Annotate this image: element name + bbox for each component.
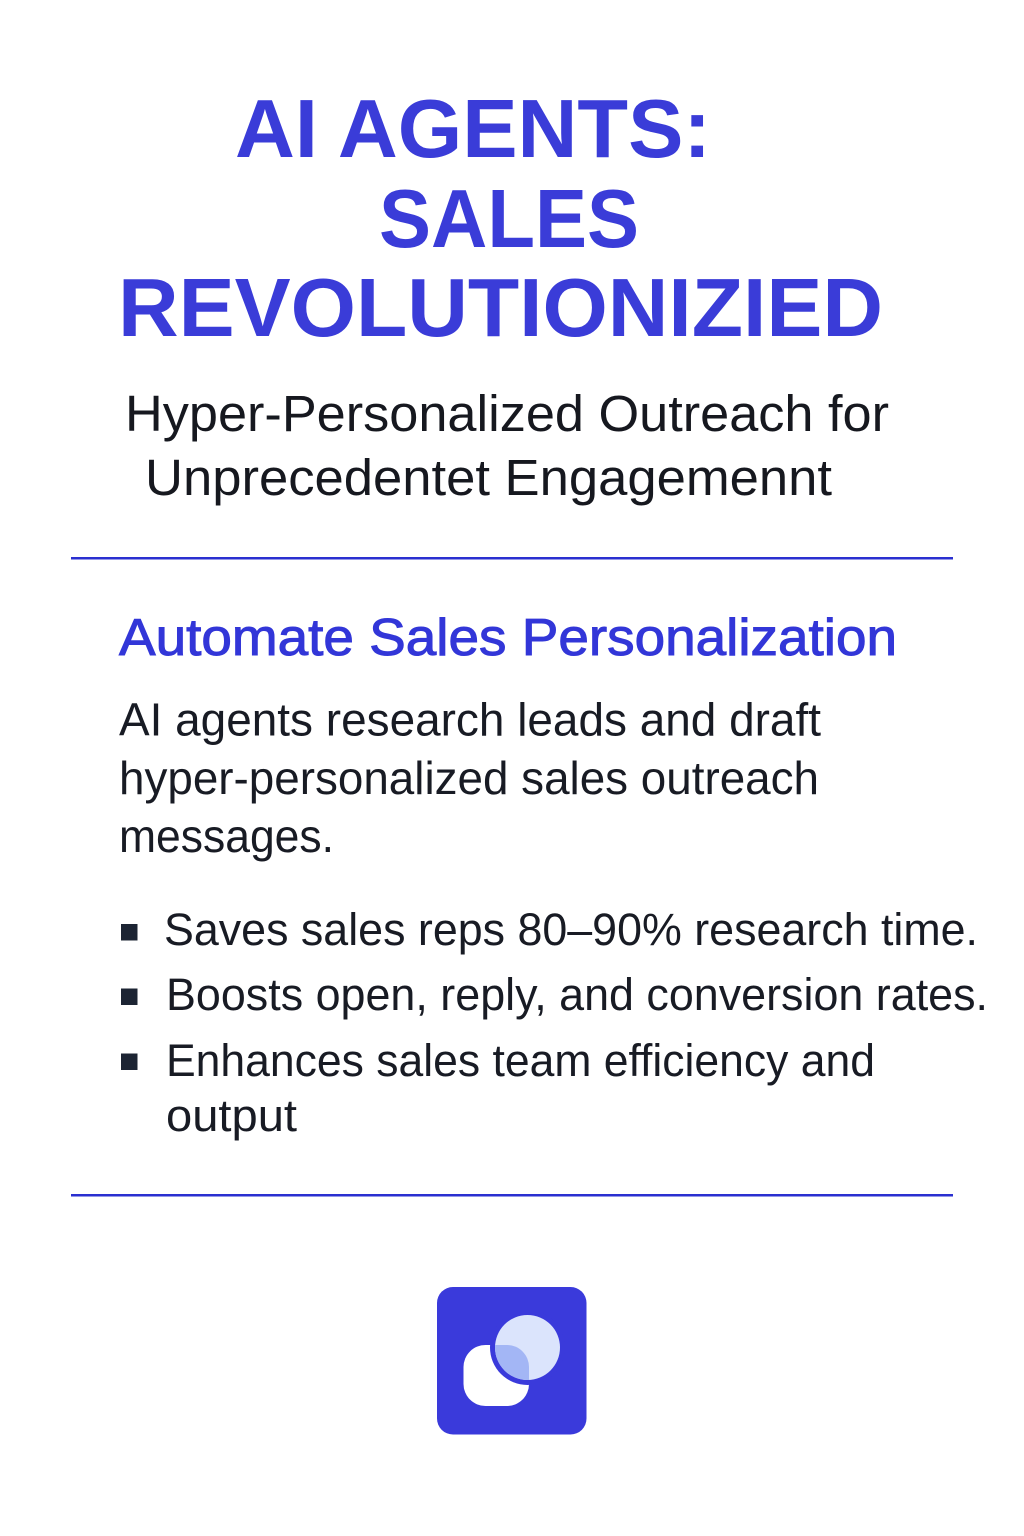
title: SALES xyxy=(379,172,639,265)
title xyxy=(118,82,883,354)
title: AI AGENTS: xyxy=(235,82,711,175)
body text: hyper-personalized sales outreach xyxy=(119,752,819,804)
bullet: team efficiency: output xyxy=(166,1090,298,1141)
bullet: conversion rates: Boosts open, reply, and conversion rates. xyxy=(166,969,988,1020)
section heading: Automate Sales Personalization xyxy=(119,609,897,667)
body text: AI agents research leads and draft xyxy=(119,694,821,746)
subtitle xyxy=(125,385,889,506)
bullet: team efficiency xyxy=(121,1035,875,1141)
bullet list xyxy=(121,904,988,1141)
body text xyxy=(119,694,821,862)
subtitle: Hyper-Personalized Outreach for xyxy=(125,385,889,442)
bullet: research time: Saves sales reps 80–90% research time. xyxy=(164,904,978,955)
subtitle: Unprecedentet Engagemennt xyxy=(145,449,832,506)
title: REVOLUTIONIZIED xyxy=(118,261,883,354)
bullet: team efficiency: Enhances sales team efficiency and xyxy=(166,1035,875,1086)
icon: overlapping shapes logo xyxy=(437,1287,586,1434)
body text: messages. xyxy=(119,810,334,862)
